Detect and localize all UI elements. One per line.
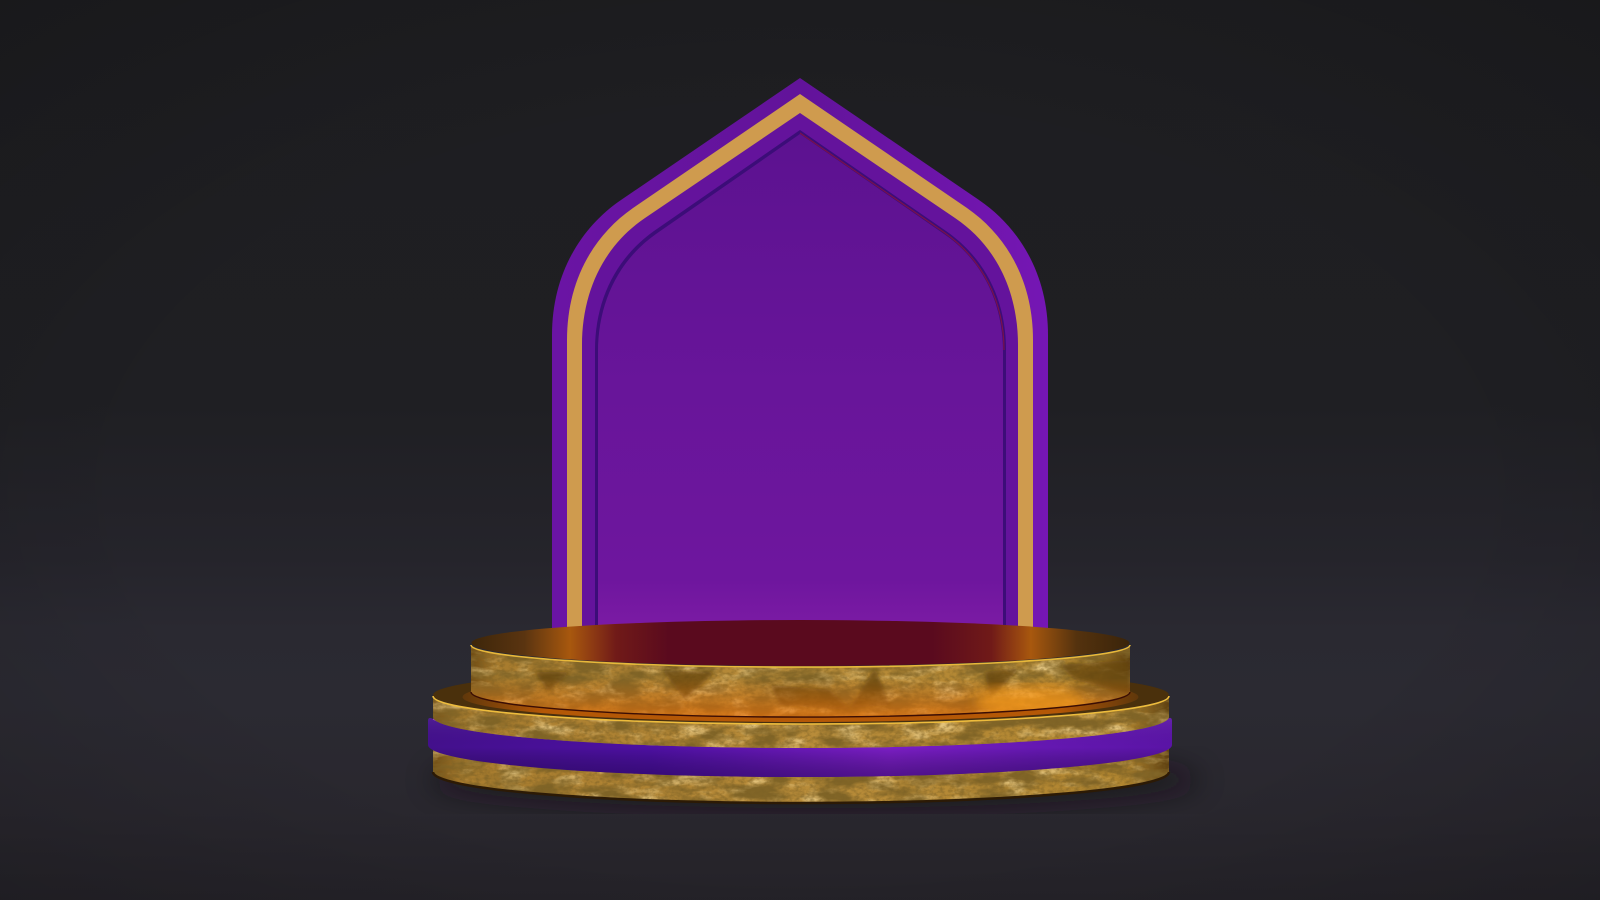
podium shadow xyxy=(430,752,1200,808)
podium: lower gold tier xyxy=(432,749,1170,804)
arch: purple and gold niche xyxy=(552,78,1048,640)
top tier bottom seam xyxy=(471,692,1130,717)
arch recess shadow line xyxy=(595,130,1006,640)
top tier side xyxy=(471,645,1130,717)
podium: purple band xyxy=(428,718,1172,777)
arch inner purple band xyxy=(582,113,1018,640)
arch gold stripe xyxy=(567,94,1033,640)
podium: top gold tier xyxy=(462,620,1138,725)
arch outer purple frame xyxy=(552,78,1048,640)
glowing reflection below the top tier xyxy=(462,672,1138,722)
arch central panel xyxy=(598,134,1003,640)
top tier upper surface xyxy=(472,620,1130,666)
top tier bright rim xyxy=(471,645,1130,667)
middle tier dark ledge xyxy=(433,667,1169,723)
podium: middle gold tier xyxy=(432,682,1170,748)
arch recess highlights xyxy=(800,133,1004,350)
